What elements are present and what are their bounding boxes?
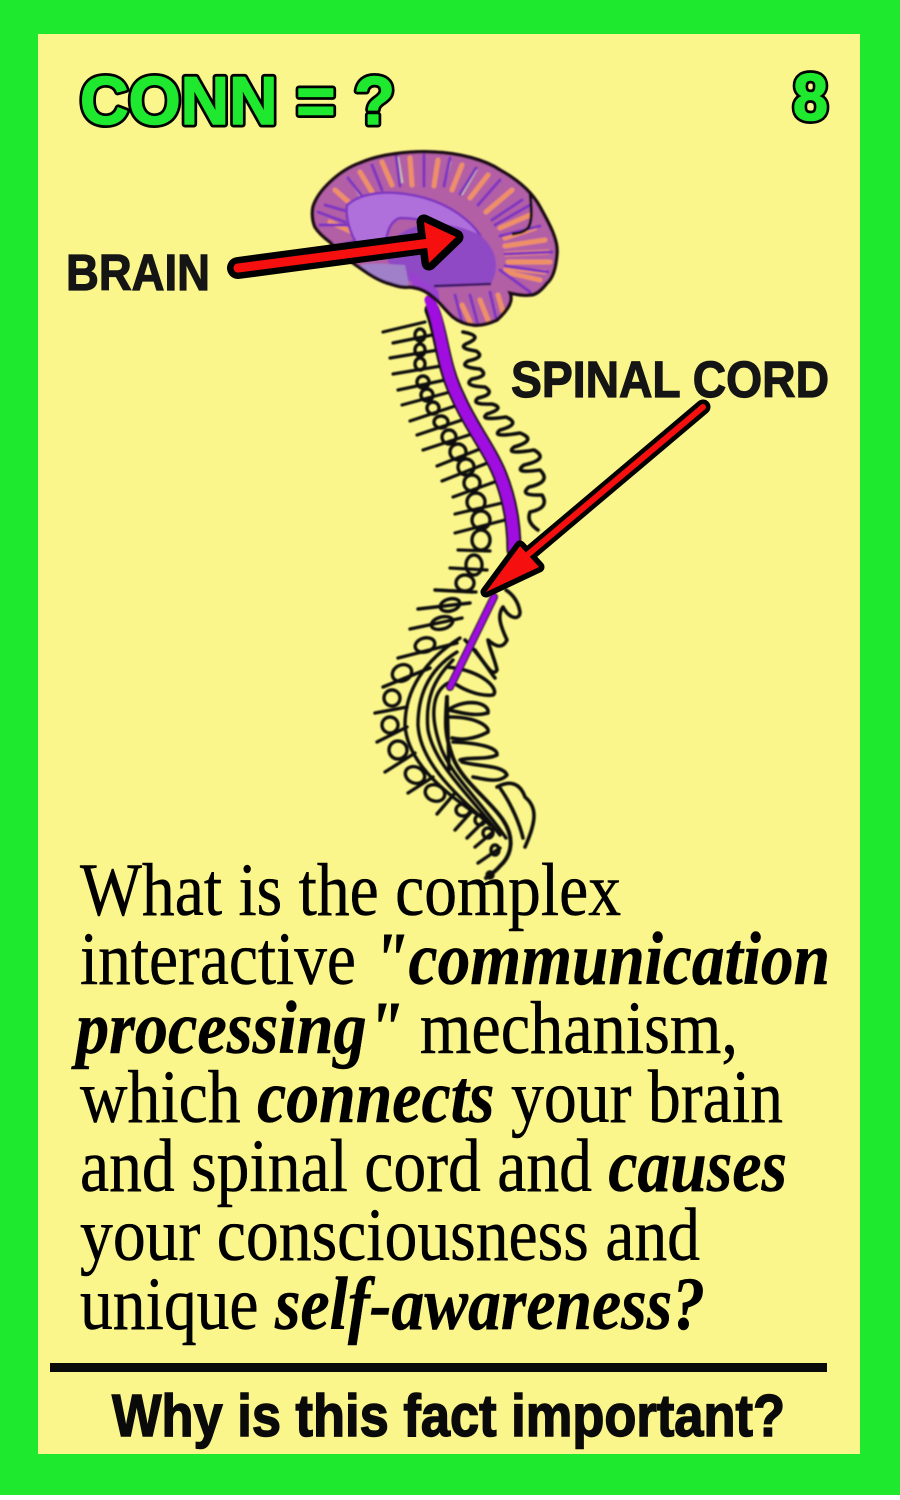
brain illustration [312, 152, 557, 330]
spine illustration [375, 300, 544, 878]
right loops [447, 590, 534, 847]
brain body [312, 152, 557, 325]
brain folds [318, 155, 552, 330]
question text: processing" mechanism, [71, 987, 738, 1070]
divider rule [50, 1363, 827, 1372]
cauda equina [405, 638, 511, 878]
question text [71, 849, 830, 1346]
brainstem [409, 272, 440, 301]
question text: and spinal cord and causes [80, 1125, 787, 1208]
arrow: spinal cord [486, 407, 703, 592]
label: BRAIN: BRAIN [66, 244, 210, 301]
question text: interactive "communication [80, 918, 830, 1001]
heading: CONN = ?: CONN = ? [80, 63, 395, 139]
question text: What is the complex [80, 849, 621, 932]
temporal region [360, 264, 410, 290]
footer question: Why is this fact important? [112, 1383, 785, 1449]
card number: 8 [793, 60, 828, 134]
right nerve squiggle [463, 332, 544, 530]
question text: which connects your brain [80, 1056, 783, 1139]
arrow: brain [238, 222, 456, 268]
question text: your consciousness and [80, 1194, 700, 1277]
vertebrae upper [415, 329, 490, 591]
lower vertebrae and nerves [375, 590, 500, 878]
corpus callosum [345, 191, 482, 241]
left nerves upper [383, 322, 505, 592]
brain outline [312, 152, 557, 325]
label: SPINAL CORD: SPINAL CORD [511, 351, 829, 408]
spinal cord [432, 310, 514, 550]
midbrain [385, 224, 496, 288]
question text: unique self-awareness? [80, 1263, 705, 1346]
card number: 8 [793, 60, 828, 134]
heading: CONN = ?: CONN = ? [80, 63, 395, 139]
